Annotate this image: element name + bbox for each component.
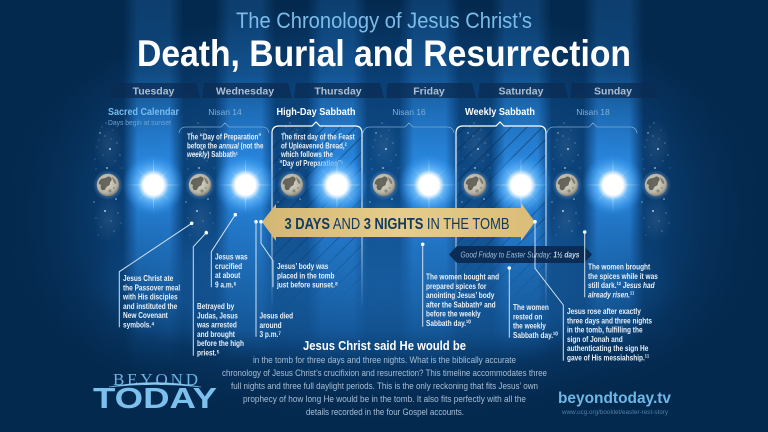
calendar day labels: Nisan 18 (576, 107, 610, 117)
logo: Beyond Today: TODAY (93, 383, 217, 415)
callout: women rested: the weekly (513, 321, 547, 331)
logo: Beyond Today (93, 370, 217, 415)
calendar day labels: Nisan 16 (392, 107, 426, 117)
day header tabs: Sunday (594, 86, 632, 98)
sunlight beams (123, 0, 644, 370)
callout: betrayed by Judas: Betrayed by (197, 301, 235, 311)
callout: women rested: rested on (513, 311, 543, 322)
callout: placed in the tomb: Jesus’ body was (277, 261, 328, 271)
callout: passover meal: symbols.⁴ (123, 320, 155, 330)
callout: women prepared spices: Sabbath day.¹⁰ (426, 318, 472, 328)
title: The Chronology of Jesus Christ’s (236, 8, 532, 33)
callout: betrayed by Judas: and brought (197, 329, 235, 339)
suns (122, 154, 644, 216)
callout: women brought spices: already risen.¹¹ (588, 289, 635, 300)
callout: passover meal: New Covenant (123, 310, 168, 320)
note: day of preparation: weekly) Sabbath¹ (187, 151, 238, 159)
callout: Jesus died: around (260, 320, 282, 330)
website: www.ucg.org/booklet/easter-rest-story (561, 409, 669, 416)
calendar day labels: High-Day Sabbath (276, 107, 356, 118)
thin brackets (179, 123, 637, 133)
callout: women prepared spices: before the weekly (426, 309, 481, 319)
callout: passover meal: the Passover meal (123, 282, 180, 293)
callout: crucified: Jesus was (215, 252, 248, 262)
website: beyondtoday.tv (558, 390, 671, 407)
calendar day labels: Weekly Sabbath (465, 107, 535, 118)
arrow: 3 days and 3 nights in the tomb (262, 203, 535, 241)
callout: Jesus rose: three days and three nights (567, 315, 652, 326)
note: first day of the feast: which follows the (280, 151, 333, 159)
sacred calendar label: Days begin at sunset (108, 118, 171, 127)
callout: betrayed by Judas: Judas, Jesus (197, 310, 238, 321)
calendar day labels: Nisan 14 (208, 107, 242, 117)
callout: Jesus died: 3 p.m.⁷ (260, 329, 281, 339)
sabbath panels with hatching (272, 122, 546, 317)
heading: Jesus Christ said He would be: Jesus Christ said He would be (303, 339, 466, 353)
callout: crucified (211, 213, 248, 290)
callout: crucified: at about (215, 270, 241, 280)
callout: passover meal: with His disciples (122, 292, 178, 302)
callout: women prepared spices: after the Sabbath⁹ and (426, 299, 496, 310)
callout: betrayed by Judas: was arrested (196, 320, 237, 330)
callout: women rested: Sabbath day.¹⁰ (513, 330, 559, 340)
body text: in the tomb for three days and three nights. What is the biblically accurate (253, 355, 516, 366)
body text (222, 355, 547, 418)
moons (93, 170, 671, 200)
callout: placed in the tomb (259, 220, 338, 290)
callout: women prepared spices: prepared spices for (426, 281, 486, 291)
callout: crucified: crucified (215, 261, 242, 271)
note: first day of the feast: of Unleavened Bread,² (281, 143, 347, 151)
banner: good friday to easter sunday: Good Friday to Easter Sunday: 1½ days (460, 250, 580, 260)
calendar day labels (208, 107, 610, 118)
day header tabs: Wednesday (216, 86, 274, 98)
callout: women brought spices: still dark.¹² Jesus had (588, 280, 655, 290)
note: first day of the feast: “Day of Preparation”¹ (279, 160, 344, 168)
banner: good friday to easter sunday (449, 246, 592, 263)
callout: women prepared spices: anointing Jesus’ body (426, 290, 495, 300)
callout: women brought spices: The women brought (588, 262, 651, 272)
sacred calendar label: Sacred Calendar (108, 107, 179, 118)
note: first day of the feast (279, 134, 355, 168)
callout: women rested (508, 266, 559, 340)
callout: crucified: 9 a.m.⁶ (215, 279, 237, 290)
callout: women brought spices (583, 230, 658, 300)
day header tabs: Thursday (314, 86, 362, 98)
callout: betrayed by Judas: before the high (197, 338, 244, 348)
callout: passover meal: Jesus Christ ate (123, 273, 173, 283)
callout: Jesus died (254, 220, 293, 339)
title (137, 8, 631, 74)
body text: full nights and three full daylight periods. This is the only reckoning that fits Jesus’ own (231, 381, 538, 392)
callout: Jesus rose: Jesus rose after exactly (567, 306, 641, 316)
note: day of preparation: before the annual (not the (187, 143, 264, 151)
day header tabs: Tuesday (133, 86, 175, 98)
callout: placed in the tomb: placed in the tomb (277, 270, 335, 281)
day header tabs: Friday (413, 86, 445, 98)
day header tabs: Saturday (499, 86, 544, 98)
callout: betrayed by Judas (193, 231, 244, 358)
callout: women brought spices: the spices while it was (588, 271, 658, 281)
callout: Jesus died: Jesus died (260, 311, 293, 321)
callout: women prepared spices: The women bought and (426, 272, 499, 282)
body text: details recorded in the four Gospel accounts. (306, 407, 464, 418)
body text: prophecy of how long He would be in the tomb. It also fits perfectly with all the (243, 394, 526, 405)
callout: Jesus rose: authenticating the sign He (567, 343, 648, 353)
callout: placed in the tomb: just before sunset.⁸ (276, 280, 338, 290)
callout: Jesus rose: sign of Jonah and (567, 334, 623, 344)
sacred calendar label (108, 107, 179, 127)
callout: women rested: The women (513, 302, 549, 312)
callout: passover meal (119, 222, 194, 330)
website (558, 390, 671, 416)
callout: Jesus rose: in the tomb, fulfilling the (567, 325, 643, 335)
body text: chronology of Jesus Christ’s crucifixion and resurrection? This timeline accommodates three (222, 368, 547, 379)
title: Death, Burial and Resurrection (137, 33, 631, 74)
note: day of preparation: The “Day of Preparation” (187, 134, 261, 142)
callout: betrayed by Judas: priest.⁵ (197, 348, 220, 358)
star fields (93, 119, 671, 243)
callout: Jesus rose (533, 220, 652, 363)
day header tabs (110, 83, 658, 98)
callout: women prepared spices (421, 242, 499, 328)
logo: Beyond Today: BEYOND (113, 370, 198, 389)
note: first day of the feast: The first day of the Feast (281, 134, 355, 142)
note: day of preparation (187, 134, 264, 159)
callout: passover meal: and instituted the (123, 301, 177, 311)
arrow: 3 days and 3 nights in the tomb: 3 DAYS AND 3 NIGHTS IN THE TOMB (284, 216, 510, 233)
callout: Jesus rose: gave of His messiahship.¹¹ (567, 353, 649, 363)
